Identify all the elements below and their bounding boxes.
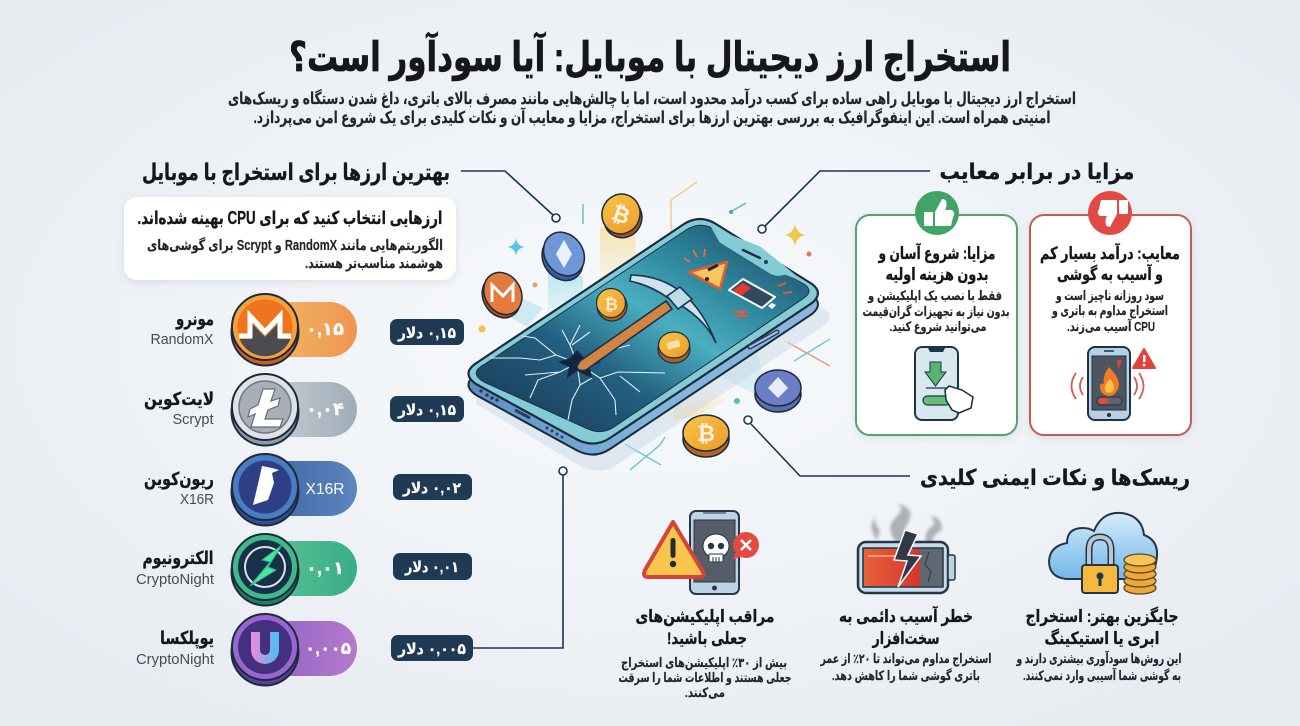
price tag: Electroneum — [393, 553, 472, 580]
tip: fake apps: می‌کنند. — [685, 685, 725, 700]
panel: pros: می‌توانید شروع کنید. — [890, 319, 986, 334]
label: Monero — [150, 309, 214, 348]
tip: hardware damage — [820, 504, 992, 683]
panel: cons: سود روزانه ناچیز است و — [1055, 288, 1164, 303]
low battery — [729, 279, 792, 316]
label: Litecoin: Scrypt — [172, 412, 214, 428]
value bar: Ravencoin — [262, 461, 357, 516]
label: Uplexa — [136, 628, 214, 668]
coin: bitcoin on screen: ₿ — [604, 295, 618, 314]
value bar: Uplexa: ۰,۰۰۵ — [305, 639, 351, 658]
heading: best coins: بهترین ارزها برای استخراج با موبایل — [142, 159, 450, 186]
icon: Uplexa coin — [232, 614, 298, 686]
label: Electroneum: CryptoNight — [136, 572, 214, 588]
speaker and camera — [743, 250, 768, 264]
connector: best coins to phone — [461, 171, 560, 222]
connector: risks to phone — [744, 416, 910, 476]
label: Electroneum: الکترونیوم — [142, 548, 214, 569]
panel: cons — [1030, 191, 1191, 435]
intro paragraph — [228, 87, 1076, 128]
panel: pros: بدون هزینه اولیه — [886, 265, 988, 285]
value bar: Uplexa — [262, 621, 357, 676]
heading: pros and cons: مزایا در برابر معایب — [940, 159, 1134, 185]
coin: bitcoin top: ₿ — [608, 200, 634, 229]
value bar: Monero: ۰,۱۵ — [306, 319, 344, 339]
panel: tip card: الگوریتم‌هایی مانند RandomX و Scrypt برای گوشی‌های — [147, 236, 443, 254]
price tag: Ravencoin: ۰,۰۲ دلار — [402, 480, 461, 497]
tip: fake apps: جعلی باشید! — [667, 629, 747, 648]
tip: fake apps — [618, 511, 792, 700]
tip: better alternative: ابری یا استیکینگ — [1044, 628, 1160, 649]
price tag: Monero: ۰,۱۵ دلار — [397, 325, 456, 342]
label: Litecoin — [144, 389, 214, 428]
connector: pros and cons to phone — [758, 171, 930, 233]
phone shadow — [476, 243, 830, 471]
value bar: Monero — [262, 302, 357, 357]
tip: fake apps: جعلی هستند و اطلاعات شما را سرقت — [618, 670, 792, 685]
label: Ravencoin: ریون‌کوین — [144, 469, 214, 490]
panel: cons: و آسیب به گوشی — [1057, 263, 1163, 285]
label: Monero: مونرو — [175, 309, 214, 330]
panel: pros: فقط با نصب یک اپلیکیشن و — [867, 288, 1002, 303]
row: Monero — [150, 294, 464, 366]
label: Litecoin: لایت‌کوین — [144, 389, 214, 410]
icon: phone with skull and warning — [644, 511, 759, 594]
panel: pros: مزایا: شروع آسان و — [878, 242, 996, 264]
coin: ethereum lower right — [755, 370, 801, 412]
price tag: Litecoin: ۰,۱۵ دلار — [397, 402, 456, 419]
row: Litecoin — [144, 374, 464, 446]
icon: thumbs up — [915, 191, 959, 235]
coin: bitcoin top — [595, 189, 649, 243]
icon: Litecoin coin — [232, 374, 298, 446]
tip: hardware damage: سخت‌افزار — [872, 629, 940, 649]
tip: better alternative: این روش‌ها سودآوری بیشتری دارند و — [1016, 650, 1182, 666]
label: Uplexa: CryptoNight — [136, 652, 214, 668]
coin: monero — [474, 265, 530, 325]
price tag: Ravencoin — [393, 474, 472, 500]
light beams — [503, 227, 775, 420]
tip: better alternative: به گوشی شما آسیبی وارد نمی‌کنند. — [1023, 667, 1181, 683]
tip: fake apps: بیش از ۳۰٪ اپلیکیشن‌های استخراج — [621, 655, 787, 671]
icon: overheating phone — [1072, 347, 1155, 420]
icon: cloud lock coins — [1049, 513, 1157, 594]
panel: cons: معایب: درآمد بسیار کم — [1040, 242, 1180, 263]
label: Electroneum — [136, 548, 214, 588]
value bar: Litecoin: ۰,۰۴ — [306, 399, 344, 419]
value bar: Electroneum — [262, 541, 357, 596]
illustration: phone with pickaxe and coins — [468, 182, 830, 471]
panel: cons: CPU آسیب می‌زند. — [1067, 318, 1155, 334]
label: Ravencoin: X16R — [180, 492, 214, 508]
tip: fake apps: مراقب اپلیکیشن‌های — [636, 607, 774, 627]
icon: Ravencoin coin — [232, 454, 298, 526]
price tag: Litecoin — [390, 396, 464, 422]
heading: risks and safety tips: ریسک‌ها و نکات ایمنی کلیدی — [920, 465, 1190, 491]
icon: Electroneum coin — [232, 534, 298, 606]
pickaxe — [577, 275, 716, 370]
tip: hardware damage: باتری گوشی شما را کاهش دهد. — [832, 668, 980, 683]
tip: better alternative: جایگزین بهتر: استخراج — [1026, 606, 1178, 627]
value bar: Ravencoin: X16R — [306, 481, 344, 498]
coin: bitcoin bottom: ₿ — [697, 421, 715, 446]
title: استخراج ارز دیجیتال با موبایل: آیا سودآور است؟ — [289, 32, 1011, 82]
row: Uplexa — [136, 614, 473, 686]
label: Monero: RandomX — [150, 332, 214, 348]
tip: better alternative — [1016, 513, 1182, 683]
phone front — [468, 219, 818, 444]
warning triangle — [684, 249, 727, 289]
connector: price list to phone — [473, 467, 567, 648]
coin: bitcoin on screen — [596, 288, 627, 321]
panel: tip card — [124, 197, 456, 280]
label: Ravencoin — [144, 469, 214, 508]
decorative sparkles and lines — [478, 182, 830, 470]
price tag: Uplexa: ۰,۰۰۵ دلار — [397, 641, 466, 658]
icon: burnt battery — [858, 504, 955, 593]
icon: thumbs down — [1088, 191, 1132, 235]
tip: hardware damage: خطر آسیب دائمی به — [839, 605, 973, 627]
panel: pros — [856, 191, 1017, 435]
panel: cons: استخراج مداوم به باتری و — [1051, 303, 1168, 319]
price tag: Uplexa — [391, 635, 473, 661]
value bar: Litecoin — [262, 382, 357, 437]
icon: phone download — [915, 347, 973, 420]
coin: bitcoin bottom — [683, 415, 729, 457]
phone side — [468, 230, 818, 455]
panel: tip card: هوشمند مناسب‌تر هستند. — [305, 256, 443, 272]
price tag: Monero — [390, 319, 464, 345]
tip: hardware damage: استخراج مداوم می‌تواند تا ۲۰٪ از عمر — [820, 651, 992, 667]
label: Uplexa: یوپلکسا — [160, 628, 214, 649]
notch — [712, 228, 806, 284]
row: Electroneum — [136, 534, 472, 606]
phone buttons and speaker — [479, 332, 777, 438]
price tag: Electroneum: ۰,۰۱ دلار — [404, 559, 459, 576]
cracks — [490, 325, 665, 420]
row: Ravencoin — [144, 454, 472, 526]
panel: pros: بدون نیاز به تجهیزات گران‌قیمت — [862, 304, 1010, 319]
value bar: Electroneum: ۰,۰۱ — [306, 558, 344, 578]
coin: gold on screen — [658, 332, 690, 363]
icon: Monero coin — [232, 294, 298, 366]
screen — [476, 225, 809, 432]
coin: ethereum — [532, 224, 594, 288]
panel: tip card: ارزهایی انتخاب کنید که برای CPU بهینه شده‌اند. — [138, 208, 442, 229]
